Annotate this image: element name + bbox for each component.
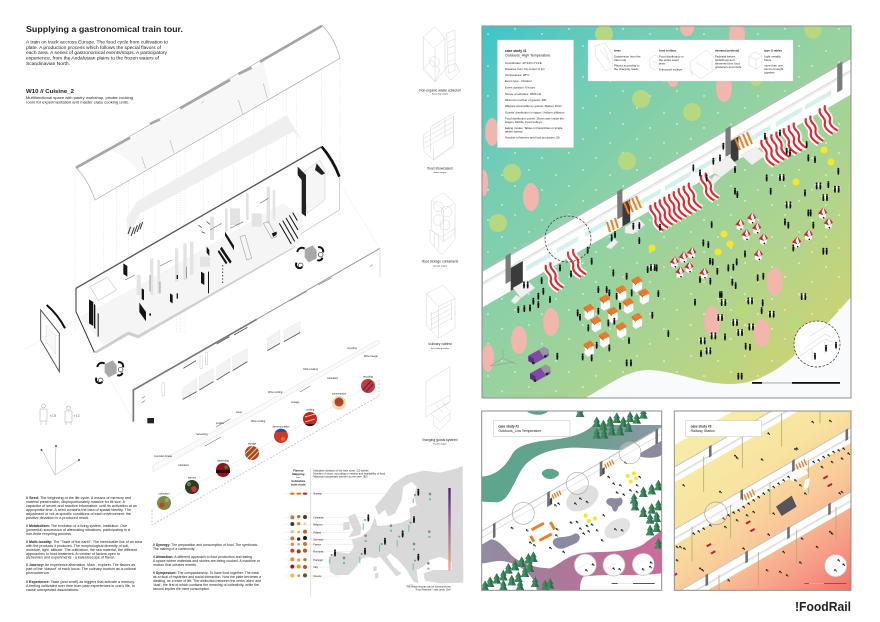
bottom white landscape bbox=[583, 297, 851, 399]
left text column: positive deviation in a produced result. bbox=[26, 516, 89, 520]
map description: Number of stops: according to season and availability of food bbox=[313, 471, 386, 475]
case study 3 label bbox=[686, 421, 762, 437]
middle text column: second implies the mere consumption. bbox=[153, 587, 210, 591]
subheading: W10 Cuisine_2: W10 // Cuisine_2 bbox=[26, 89, 74, 95]
flavour mapping heading: from bbox=[296, 476, 301, 479]
row guide lines bbox=[285, 494, 393, 576]
card: elements legend: area bbox=[659, 62, 665, 66]
yellow balloons bbox=[648, 146, 834, 256]
circle: farmers market bbox=[274, 429, 288, 443]
panel: case study 3 bbox=[674, 410, 852, 591]
title: Supplying a gastronomical train tour. bbox=[26, 24, 183, 34]
card: case study 1 data: tables spread bbox=[505, 130, 523, 134]
middle text column: dieating, as a trace of life. The distinction between the verbs 'alien' and bbox=[153, 579, 261, 583]
map country labels: Portugal bbox=[313, 559, 323, 562]
label: waste collector: !non-organic waste collector! bbox=[419, 88, 461, 92]
card: elements legend: Pedestal before, bbox=[715, 54, 736, 58]
pine trees bbox=[481, 406, 663, 591]
green blobs bbox=[527, 411, 559, 479]
upper train line bbox=[674, 412, 798, 482]
exploded axonometric train wagon bbox=[23, 25, 380, 423]
upper route timeline: Wine cooling bbox=[251, 420, 266, 423]
intro text block: each area. A series of gastronomical events/stops. A participatory bbox=[26, 50, 168, 55]
red and white tents bbox=[670, 207, 833, 279]
middle train line bbox=[674, 427, 851, 545]
card: case study 1 data: Event type - Outdoor bbox=[505, 79, 532, 83]
map route markers bbox=[329, 489, 431, 570]
ceiling layer bbox=[127, 115, 302, 238]
flavour mapping heading: Indicative bbox=[291, 479, 306, 483]
panel border bbox=[482, 26, 851, 398]
card: elements legend: Food distribution in bbox=[659, 54, 684, 58]
purple food trucks bbox=[528, 347, 550, 382]
white tables with guests bbox=[521, 174, 841, 354]
middle text column: // Attraction: A different approach to food production and eating. bbox=[153, 555, 253, 559]
left text column: non-finite recycling process. bbox=[26, 532, 72, 536]
label: hanging goods system bbox=[422, 438, 458, 446]
label: food storage containers: storage wagon bbox=[433, 265, 448, 268]
label: hanging goods system: Events wagon bbox=[433, 443, 448, 446]
left text column: capacitor of secret and reactive information, until its activation at an bbox=[26, 504, 137, 508]
crowd of visitors bbox=[517, 129, 839, 380]
panel background bbox=[482, 26, 851, 398]
sketch: food showcases bbox=[423, 113, 453, 160]
panel border bbox=[674, 411, 851, 590]
card: case study 1 data: Minimum number of guests: 300 bbox=[505, 98, 547, 102]
middle text column: // Synergy: The preparation and consumption of food. The symbiosis. bbox=[153, 543, 258, 547]
card: case study 1 data: Scope of activities: 4500 m2 bbox=[505, 92, 542, 96]
guests bbox=[511, 461, 641, 553]
circle: cultivation bbox=[157, 496, 171, 510]
label: hanging goods system: !hanging goods system! bbox=[422, 438, 458, 442]
card: case study 1 data: Temperature: 28°C bbox=[505, 73, 529, 77]
label: culinary cabins: the cooking wagon bbox=[431, 347, 450, 350]
dotted projection lines bbox=[23, 30, 380, 420]
lower train joints bbox=[706, 503, 831, 586]
left text column: cause unexpected associations. bbox=[26, 588, 79, 592]
purple-pink landscape band bbox=[482, 530, 662, 590]
striped red awnings bbox=[546, 105, 838, 290]
upper route timeline: Chile cooking bbox=[303, 368, 319, 371]
red benches bbox=[674, 475, 833, 576]
panel background bbox=[674, 411, 851, 590]
food cycle timeline with photo circles: cooking bbox=[306, 408, 315, 412]
panel background bbox=[482, 411, 662, 590]
circle: cooking bbox=[303, 412, 317, 426]
logo: !FoodRail: !FoodRail bbox=[795, 600, 851, 614]
middle text column: mutton that creates events. bbox=[153, 563, 197, 567]
end wall panel bbox=[41, 305, 65, 372]
card: case study 1 data: Guests' distribution in space: Uniform diffusion bbox=[505, 110, 565, 114]
flavour mapping heading: train route bbox=[291, 483, 306, 487]
middle text column: 'dust', the first of which contains the meaning of collectivity, while the bbox=[153, 583, 259, 587]
upper route timeline: storage bbox=[291, 401, 300, 404]
left text column: // Experience: Taste (and smell) as triggers that activate a memory. bbox=[26, 580, 135, 584]
card: elements legend: elevated pedestal bbox=[715, 48, 739, 52]
tan poles bbox=[692, 412, 836, 590]
left text column: approaches to food treatment. A number of factors open to bbox=[26, 552, 120, 556]
card: elements legend: producers and chefs bbox=[715, 65, 742, 69]
sketch: food storage containers bbox=[430, 193, 455, 255]
human scale labels: x 1.5 bbox=[50, 414, 57, 418]
card: case study 1 data: Number of farmers and food producers: 56 bbox=[505, 136, 560, 140]
card: elements legend: type O tables bbox=[764, 48, 783, 52]
white platform bbox=[732, 467, 810, 511]
roof shell bbox=[76, 25, 340, 200]
left text column: adjustment or not at specific conditions of each environment: the bbox=[26, 512, 131, 516]
card: elements legend: Placed according to bbox=[614, 64, 640, 68]
snow dots bbox=[482, 26, 851, 398]
card: elements legend: frame bbox=[764, 58, 772, 62]
left text column: (powerful) succession of alternating situations, participating in a bbox=[26, 528, 130, 532]
upper route timeline: mountain forage bbox=[154, 455, 173, 458]
decorative pink ellipses bbox=[480, 20, 783, 372]
map: Europe bbox=[328, 466, 463, 587]
map country labels: Romania bbox=[313, 550, 324, 553]
label: food showcases bbox=[427, 166, 453, 174]
circle: recycling bbox=[361, 379, 375, 393]
card: case study 1 data bbox=[498, 40, 574, 148]
train and stops bbox=[483, 56, 852, 307]
card: elements legend: elements from food bbox=[715, 62, 740, 66]
left text column: with the products it produces. The morphological diversity of soil, bbox=[26, 544, 129, 548]
orange market huts bbox=[584, 276, 650, 357]
card: elements legend: train rods bbox=[614, 58, 627, 62]
dashed detail circle on train bbox=[545, 216, 591, 262]
left text column: // Metabolism: The evolution of a living system. Institution. One bbox=[26, 524, 127, 528]
yellow balloons bbox=[584, 471, 638, 523]
grey detail circles on train bbox=[512, 442, 641, 524]
label: food showcases: !food showcases! bbox=[427, 166, 453, 170]
card: case study 1 data: Coordinates: 40°24'N 1°13'E bbox=[505, 61, 542, 65]
left text column: moisture, light, altitude. The cultivation, the raw material, the different bbox=[26, 548, 137, 552]
scale bar bbox=[804, 582, 847, 585]
upper route timeline: harvesting bbox=[196, 433, 208, 436]
label: waste collector: Recycling wagon bbox=[432, 94, 449, 96]
floor plan with kitchen furniture bbox=[76, 147, 339, 353]
side wall bbox=[133, 248, 380, 423]
purple blobs bbox=[553, 441, 662, 549]
left text column: material preservation, disproportionately massive for its size. A bbox=[26, 500, 126, 504]
rear bogie bbox=[296, 245, 323, 268]
human scale labels: x 1.2 bbox=[74, 414, 80, 418]
card: elements legend: Light metallic bbox=[764, 54, 781, 58]
upper route timeline: studios bbox=[216, 422, 225, 425]
left text column: part of the 'classof' of each locus. The culinary tourism as a cultural bbox=[26, 567, 136, 571]
sketch: non-organic waste collector bbox=[423, 27, 459, 82]
card: case study 1 data: Distance from city center: 6 km bbox=[505, 67, 545, 71]
food cycle timeline with photo circles: consumption bbox=[332, 392, 347, 396]
flavour mapping heading bbox=[291, 468, 306, 487]
intro text block: A train on track accross Europe. The food cycle from cultivation to bbox=[26, 40, 169, 44]
left text column: // Journey: An experience alternation. Main - explorer. The flavors as bbox=[26, 563, 135, 567]
human scale labels bbox=[50, 414, 80, 418]
map footnote: "Food Passions", map credit: Chef bbox=[415, 588, 451, 591]
map footnote bbox=[407, 585, 451, 591]
dashed detail circle: seating sketch bbox=[794, 321, 840, 367]
left text column: // Multi-locality: The "Taste of the earth". The inextricable link of an area bbox=[26, 540, 142, 544]
axis glyph bbox=[490, 349, 516, 366]
card: elements legend: Enhanced trolleys bbox=[659, 68, 683, 72]
card: elements legend: more than one bbox=[764, 64, 783, 68]
map country labels bbox=[313, 493, 324, 578]
orange door stripes bbox=[607, 132, 752, 232]
grey stop ellipses bbox=[566, 485, 598, 512]
map country labels: Greece bbox=[313, 575, 322, 578]
map country labels: France bbox=[313, 544, 322, 547]
train joints bbox=[709, 445, 712, 458]
upper route timeline: sleep bbox=[236, 411, 243, 414]
food cycle timeline with photo circles: harvest bbox=[188, 476, 196, 480]
panel: case study 1 bbox=[480, 20, 852, 399]
card: elements legend: the charging needs bbox=[614, 67, 639, 71]
map description: Indicative duration of the train route: 2,5 weeks bbox=[313, 468, 369, 472]
scale bar bbox=[752, 382, 840, 384]
food icon rows bbox=[290, 492, 307, 578]
map country labels: Lithuania bbox=[313, 517, 324, 520]
map panel bbox=[285, 466, 463, 597]
white detail circles bbox=[574, 553, 654, 576]
decorative green circles bbox=[489, 26, 822, 332]
upper route timeline: Wine lounge bbox=[364, 355, 379, 358]
card: elements legend: food trolleys bbox=[659, 48, 677, 52]
axis diagram bbox=[41, 445, 80, 475]
label: food storage containers bbox=[422, 260, 458, 268]
card: case study 1 data: Wagons accessible by guests: Market, Diner bbox=[505, 104, 562, 108]
lower train line bbox=[674, 491, 851, 609]
wagon sketches column bbox=[419, 27, 461, 446]
upper route timeline: Wine cooling bbox=[268, 391, 283, 394]
map country labels: Norway bbox=[313, 493, 323, 496]
case study 2 label bbox=[493, 421, 570, 437]
subheading description bbox=[26, 96, 133, 104]
entrance platforms bbox=[511, 147, 766, 304]
card: elements legend: together bbox=[764, 70, 775, 74]
label: food storage containers: !food storage containers! bbox=[422, 260, 458, 264]
front bogie bbox=[96, 360, 123, 383]
intro text block: experience, from the Andalusian plains to the frozen waters of bbox=[26, 56, 160, 60]
upper route timeline bbox=[153, 340, 380, 472]
middle train joints bbox=[740, 428, 848, 502]
circle: consumption bbox=[332, 396, 346, 410]
green landscape band bbox=[482, 425, 662, 502]
map description bbox=[313, 468, 386, 478]
food cycle timeline with photo circles: storage bbox=[248, 442, 257, 446]
card: case study 1 data: Outdoors_High Temperature bbox=[505, 54, 550, 58]
food cycle timeline with photo circles: farmers/market bbox=[273, 426, 290, 428]
white detail circle bbox=[825, 555, 847, 577]
case study 2 label: case study #2 bbox=[498, 424, 519, 428]
card: elements legend: workshops and bbox=[715, 58, 735, 62]
intro text block: plate. A production process which follows the special flavors of bbox=[26, 45, 162, 50]
white corner bbox=[674, 411, 733, 445]
food cycle timeline with photo circles: recycling bbox=[363, 376, 374, 378]
food cycle timeline with photo circles bbox=[152, 376, 379, 525]
card: case study 1 data: wagon, Mobile, Food trolleys bbox=[505, 120, 542, 124]
card: elements legend: Suspension from the bbox=[614, 54, 641, 58]
human scale figures bbox=[40, 404, 72, 425]
orange door stripes bbox=[744, 459, 807, 500]
grey stop ellipse right bbox=[604, 518, 630, 538]
scale bar bbox=[612, 583, 655, 584]
map country labels: Italy bbox=[313, 566, 319, 569]
subheading description: Multifunctional space with pastry workshop, private cooking bbox=[26, 96, 133, 100]
middle text column: A space where materials and stories are being cooked. A machine or bbox=[153, 559, 261, 563]
left text column: alchemies and experiments - a kaleidoscope of flavor. bbox=[26, 556, 115, 560]
temperature gradient bar bbox=[448, 488, 451, 571]
card: case study 1 data: case study #1 bbox=[505, 49, 527, 53]
label: waste collector bbox=[419, 88, 461, 96]
case study 2 label: Outdoors_Low Temperature bbox=[498, 429, 542, 433]
card: elements legend: tents bbox=[614, 48, 621, 52]
middle text column: as a ritual of mysteries and social interaction. Now the plate becomes a bbox=[153, 575, 261, 579]
orange long tables bbox=[529, 521, 556, 542]
upper route timeline: cultivation bbox=[178, 464, 190, 467]
intro text block bbox=[26, 40, 169, 66]
middle text column: // Symposium: The companionship. To have food together. The meal bbox=[153, 571, 259, 575]
map country labels: Germany bbox=[313, 538, 324, 541]
upper route timeline: recycling bbox=[347, 347, 357, 350]
sketch: hanging goods system bbox=[426, 367, 450, 430]
card: elements legend bbox=[588, 40, 793, 81]
label: food showcases: dinner wagon bbox=[434, 171, 447, 174]
flavour mapping heading: Flavour bbox=[293, 468, 305, 472]
map description: Maximum passenger number at one time: 300 bbox=[313, 474, 368, 478]
card: case study 1 data: Food distribution points: Show case inside the bbox=[505, 116, 564, 120]
label: culinary cabins bbox=[428, 342, 452, 350]
case study 3 label: Railway Station bbox=[691, 429, 715, 433]
circle: harvest bbox=[185, 480, 199, 494]
middle text column: The making of a community. bbox=[153, 547, 195, 551]
map country labels: Poland bbox=[313, 531, 322, 534]
guests in detail circles bbox=[578, 560, 652, 572]
sketch: culinary cabins bbox=[427, 285, 455, 338]
intro text block: Scandinavian North. bbox=[26, 61, 70, 66]
left text column: A feeling cultivated over time from past experiences in one's life, to bbox=[26, 584, 135, 588]
grey detail circle bbox=[705, 502, 727, 525]
left text column: appropriate time. A seed contains the idea of spatial identity. The bbox=[26, 508, 131, 512]
circle: storage bbox=[245, 446, 259, 460]
flavour mapping heading: Mapping bbox=[292, 472, 305, 476]
map footnote: *no certain itinerary can be summarized as bbox=[407, 585, 451, 588]
passengers bbox=[676, 420, 850, 582]
left text column: // Seed: The beginning of the life cycle. A means of memory and bbox=[26, 496, 131, 500]
food cycle timeline with photo circles: harvesting bbox=[217, 460, 229, 462]
left text column bbox=[26, 496, 142, 592]
card: elements legend: the entire event bbox=[659, 58, 679, 62]
food cycle timeline with photo circles: cultivation bbox=[158, 492, 170, 496]
subheading description: room for experimentation and master class cooking units. bbox=[26, 100, 129, 104]
train line bbox=[482, 426, 662, 545]
card: elements legend: can be brought bbox=[764, 67, 783, 71]
circle: harvesting bbox=[216, 463, 230, 477]
label: culinary cabins: !culinary cabins! bbox=[428, 342, 452, 346]
panel: case study 2 bbox=[481, 406, 663, 591]
panel border bbox=[482, 411, 662, 590]
middle text column bbox=[153, 543, 261, 591]
train body bbox=[483, 56, 852, 307]
case study 3 label: case study #3 bbox=[691, 424, 712, 428]
wall windows bbox=[162, 322, 300, 399]
upper route timeline: cultivation bbox=[327, 377, 339, 380]
card: case study 1 data: Eating modes: Tables in hierarchies or single bbox=[505, 126, 563, 130]
map country labels: Belgium bbox=[313, 524, 322, 527]
dark platform structure bbox=[776, 496, 797, 516]
card: case study 1 data: Event duration: 6 hours bbox=[505, 86, 535, 90]
left text column: phenomenon. bbox=[26, 571, 50, 575]
